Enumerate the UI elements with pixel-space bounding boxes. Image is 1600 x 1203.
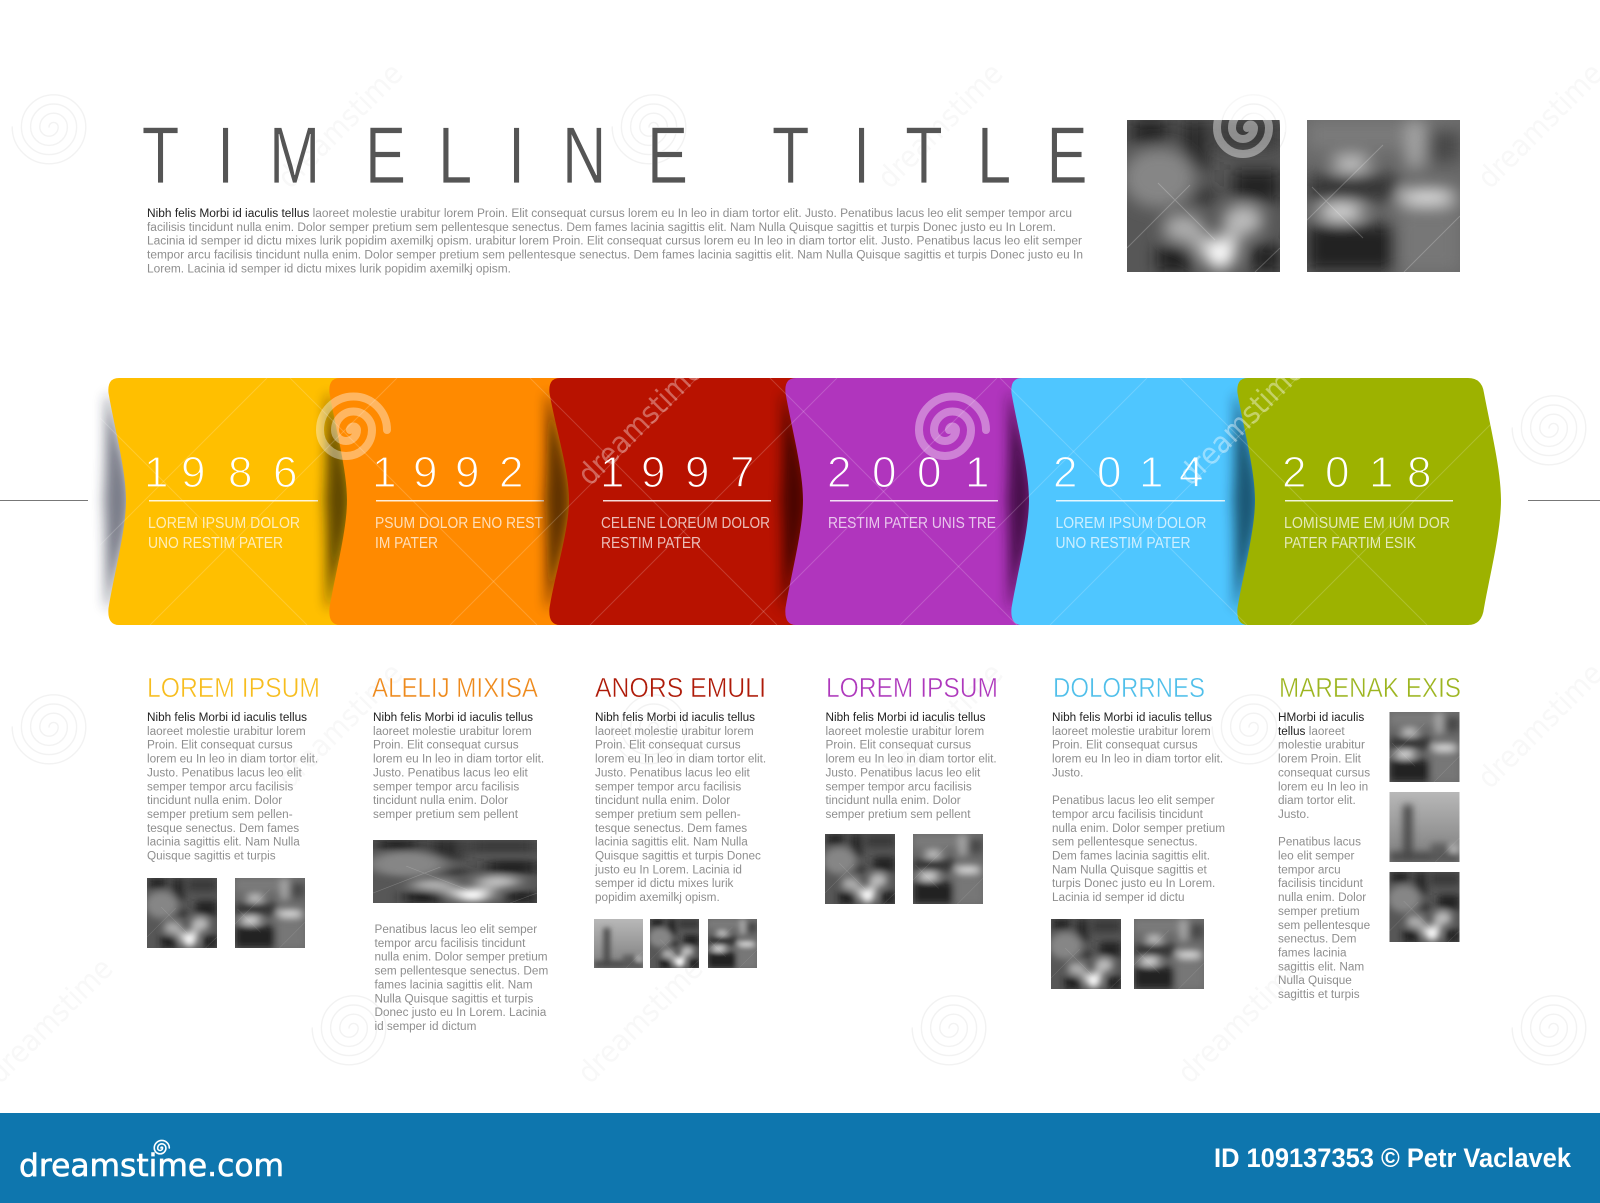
body text: leo elit semper bbox=[1278, 850, 1354, 862]
body text: Penatibus lacus bbox=[1278, 836, 1361, 849]
body text: Justo. bbox=[1278, 808, 1309, 821]
body text: laoreet molestie urabitur lorem bbox=[147, 725, 306, 738]
body text: facilisis tincidunt bbox=[1278, 877, 1364, 890]
body text: sagittis elit. Nam bbox=[1278, 960, 1364, 973]
column: Dolorrnes bbox=[1049, 672, 1225, 989]
watermark: faint spirals and text on white: dreamstime bbox=[271, 56, 410, 196]
photo bbox=[913, 834, 983, 904]
watermark: faint spirals and text on white: dreamstime bbox=[1171, 951, 1310, 1091]
card: 2001 bbox=[781, 378, 1040, 625]
wide photo bbox=[369, 840, 537, 903]
card: 1992 bbox=[325, 378, 580, 625]
photo bbox=[649, 919, 699, 968]
body text: semper pretium sem pellent bbox=[826, 808, 971, 821]
card: 2018: PATER FARTIM ESIK bbox=[1284, 535, 1416, 552]
body text: Proin. Elit consequat cursus bbox=[1052, 739, 1198, 752]
body text: semper pretium sem pellent bbox=[373, 808, 519, 821]
body text second paragraph: Donec justo eu In Lorem. Lacinia bbox=[374, 1006, 547, 1019]
body text: Justo. Penatibus lacus leo elit bbox=[147, 766, 303, 779]
header photo: buildings placeholder bbox=[1307, 120, 1460, 272]
card: 1997: CELENE LOREUM DOLOR bbox=[601, 515, 770, 532]
watermark overlay on band: dreamstime bbox=[1172, 353, 1311, 493]
heading: ANORS EMULI bbox=[595, 672, 766, 703]
body text: tincidunt nulla enim. Dolor bbox=[147, 794, 282, 807]
card: 1992: 1992 bbox=[372, 448, 523, 497]
body text: Dem fames lacinia sagittis elit. bbox=[1052, 850, 1210, 862]
body text: laoreet bbox=[1309, 725, 1345, 738]
card: 1986: 1986 bbox=[144, 448, 297, 497]
body text: tempor arcu bbox=[1278, 863, 1341, 876]
heading: LOREM IPSUM bbox=[147, 672, 320, 703]
photo bbox=[1390, 792, 1460, 862]
body text: semper tempor arcu facilisis bbox=[826, 780, 972, 793]
body text: turpis Donec justo eu In Lorem. bbox=[1052, 877, 1215, 890]
watermark overlay on band: dreamstime bbox=[571, 353, 710, 493]
column: Lorem Ipsum purple bbox=[823, 672, 998, 904]
body text: semper pretium sem pellen- bbox=[147, 808, 293, 821]
body text: tesque senectus. Dem fames bbox=[595, 822, 747, 835]
body text: tempor arcu facilisis tincidunt bbox=[1052, 808, 1204, 821]
body text: tincidunt nulla enim. Dolor bbox=[373, 794, 508, 807]
body text: Quisque sagittis et turpis Donec bbox=[595, 850, 761, 862]
body text: lorem eu In leo in bbox=[1278, 780, 1368, 793]
body text: Nibh felis Morbi id iaculis tellus bbox=[373, 711, 533, 724]
column: Anors Emuli bbox=[594, 672, 766, 968]
body text second paragraph: Nulla Quisque sagittis et turpis bbox=[374, 992, 533, 1005]
body text: lorem eu In leo in diam tortor elit. bbox=[595, 753, 766, 766]
photo bbox=[1388, 872, 1460, 942]
body text: Proin. Elit consequat cursus bbox=[147, 739, 293, 752]
card: 1986: UNO RESTIM PATER bbox=[148, 535, 283, 552]
body text: Justo. bbox=[1052, 766, 1083, 779]
title: TIMELINE TITLE bbox=[142, 111, 1088, 201]
watermark overlay on band bbox=[104, 378, 1490, 625]
body text: sem pellentesque bbox=[1278, 919, 1371, 932]
body text second paragraph: nulla enim. Dolor semper pretium bbox=[374, 951, 548, 964]
body text: Nibh felis Morbi id iaculis tellus bbox=[1052, 711, 1212, 724]
photo bbox=[145, 878, 217, 948]
body text: lorem Proin. Elit bbox=[1278, 753, 1362, 766]
photo bbox=[235, 878, 305, 948]
body text second paragraph: sem pellentesque senectus. Dem bbox=[374, 965, 548, 978]
body text: semper pretium bbox=[1278, 905, 1360, 918]
column: Lorem Ipsum bbox=[145, 672, 320, 948]
card: 2014: LOREM IPSUM DOLOR bbox=[1056, 515, 1206, 532]
intro text block: Lacinia id semper id dictu mixes lurik popidim axemilkj opism. urabitur lorem Proin. Elit consequat cursus lorem eu In leo in diam tortor elit. Justo. Penatibus lacus leo elit semper bbox=[147, 235, 1082, 248]
body text: laoreet molestie urabitur lorem bbox=[826, 725, 984, 738]
body text: molestie urabitur bbox=[1278, 739, 1365, 752]
body text: diam tortor elit. bbox=[1278, 794, 1356, 807]
body text: tincidunt nulla enim. Dolor bbox=[826, 794, 961, 807]
body text: HMorbi id iaculis bbox=[1278, 711, 1364, 724]
body text: semper pretium sem pellen- bbox=[595, 808, 741, 821]
body text: semper tempor arcu facilisis bbox=[147, 780, 293, 793]
body text: sem pellentesque senectus. bbox=[1052, 836, 1198, 849]
card: 2014: 2014 bbox=[1053, 448, 1203, 497]
footer logo: dreamstime.com bbox=[19, 1148, 284, 1184]
body text: consequat cursus bbox=[1278, 766, 1370, 779]
card: 1997: RESTIM PATER bbox=[601, 535, 701, 552]
heading: DOLORRNES bbox=[1053, 672, 1205, 703]
card: 2014: UNO RESTIM PATER bbox=[1056, 535, 1190, 552]
body text: fames lacinia bbox=[1278, 946, 1347, 959]
card: 1997: 1997 bbox=[600, 448, 754, 497]
watermark: faint spirals and text on white: dreamstime bbox=[871, 656, 1010, 796]
body text: lorem eu In leo in diam tortor elit. bbox=[826, 753, 997, 766]
body text: lorem eu In leo in diam tortor elit. bbox=[1052, 753, 1223, 766]
body text: lorem eu In leo in diam tortor elit. bbox=[147, 753, 318, 766]
body text: Proin. Elit consequat cursus bbox=[373, 739, 519, 752]
photo bbox=[823, 834, 895, 904]
header photo: flower placeholder bbox=[1123, 120, 1280, 272]
intro text block bbox=[147, 207, 1083, 275]
photo bbox=[708, 919, 757, 968]
body text: Nibh felis Morbi id iaculis tellus bbox=[147, 711, 307, 724]
body text: sagittis et turpis bbox=[1278, 988, 1360, 1001]
card: 2018: 2018 bbox=[1282, 448, 1431, 497]
card: 2018: LOMISUME EM IUM DOR bbox=[1284, 515, 1450, 532]
body text: Penatibus lacus leo elit semper bbox=[1052, 794, 1215, 807]
card: 2014 bbox=[1007, 378, 1265, 625]
body text: Nam Nulla Quisque sagittis et bbox=[1052, 863, 1208, 876]
timeline axis left stub bbox=[0, 500, 88, 501]
watermark spiral over header photo bbox=[1217, 94, 1284, 154]
card: 1992: PSUM DOLOR ENO REST bbox=[375, 515, 543, 532]
body text: nulla enim. Dolor bbox=[1278, 891, 1366, 904]
body text: semper tempor arcu facilisis bbox=[595, 780, 741, 793]
body text second paragraph: id semper id dictum bbox=[374, 1020, 477, 1033]
body text: semper tempor arcu facilisis bbox=[373, 780, 519, 793]
body text: senectus. Dem bbox=[1278, 933, 1357, 946]
heading: ALELIJ MIXISA bbox=[372, 672, 538, 703]
body text: tellus bbox=[1278, 725, 1306, 738]
card: 1997 bbox=[545, 378, 815, 625]
body text: Justo. Penatibus lacus leo elit bbox=[595, 766, 751, 779]
body text: tesque senectus. Dem fames bbox=[147, 822, 299, 835]
body text: tincidunt nulla enim. Dolor bbox=[595, 794, 730, 807]
body text: semper id dictu mixes lurik bbox=[595, 877, 734, 890]
body text: laoreet molestie urabitur lorem bbox=[373, 725, 532, 738]
body text: Proin. Elit consequat cursus bbox=[595, 739, 741, 752]
card: 1986 bbox=[104, 378, 360, 625]
photo bbox=[1134, 919, 1204, 989]
body text: Justo. Penatibus lacus leo elit bbox=[826, 766, 981, 779]
body text second paragraph: fames lacinia sagittis elit. Nam bbox=[374, 978, 533, 991]
card: 1992: IM PATER bbox=[375, 535, 438, 552]
body text: Nulla Quisque bbox=[1278, 974, 1352, 987]
body text second paragraph: Penatibus lacus leo elit semper bbox=[374, 923, 537, 936]
footer bar bbox=[0, 1113, 1600, 1203]
body text: lacinia sagittis elit. Nam Nulla bbox=[595, 836, 748, 849]
intro text block: tempor arcu facilisis tincidunt nulla enim. Dolor semper pretium sem pellentesque senectus. Dem fames lacinia sagittis elit. Nam Nulla Quisque sagittis et turpis Donec justo eu In bbox=[147, 249, 1083, 262]
body text: popidim axemilkj opism. bbox=[595, 891, 720, 904]
body text: laoreet molestie urabitur lorem bbox=[1052, 725, 1211, 738]
body text second paragraph: tempor arcu facilisis tincidunt bbox=[374, 937, 526, 950]
body text: Justo. Penatibus lacus leo elit bbox=[373, 766, 529, 779]
body text: Lacinia id semper id dictu bbox=[1052, 891, 1185, 904]
arrow band bbox=[104, 378, 1501, 625]
card: 1986: LOREM IPSUM DOLOR bbox=[148, 515, 300, 532]
heading: LOREM IPSUM bbox=[826, 672, 998, 703]
body text: laoreet molestie urabitur lorem bbox=[595, 725, 754, 738]
photo bbox=[1049, 919, 1121, 989]
card: 2001: RESTIM PATER UNIS TRE bbox=[828, 515, 996, 532]
body text: lacinia sagittis elit. Nam Nulla bbox=[147, 836, 300, 849]
intro text block: Lorem. Lacinia id semper id dictu mixes lurik popidim axemilkj opism. bbox=[147, 262, 511, 275]
footer credit: ID 109137353 © Petr Vaclavek bbox=[1214, 1143, 1572, 1173]
watermark: faint spirals and text on white: dreamstime bbox=[271, 656, 410, 796]
intro text block: facilisis tincidunt nulla enim. Dolor semper pretium sem pellentesque senectus. Dem fames lacinia sagittis elit. Nam Nulla Quisque sagittis et turpis Donec justo eu In Lorem. bbox=[147, 221, 1056, 234]
body text: justo eu In Lorem. Lacinia id bbox=[594, 863, 742, 876]
photo bbox=[1390, 712, 1460, 782]
body text: nulla enim. Dolor semper pretium bbox=[1052, 822, 1225, 835]
card: 2018 bbox=[1233, 378, 1501, 625]
column: Marenak Exis bbox=[1278, 672, 1461, 1001]
body text: Proin. Elit consequat cursus bbox=[826, 739, 971, 752]
body text: Nibh felis Morbi id iaculis tellus bbox=[826, 711, 986, 724]
column: Alelij Mixisa bbox=[369, 672, 548, 1033]
card: 2001: 2001 bbox=[827, 448, 989, 497]
body text: Nibh felis Morbi id iaculis tellus bbox=[595, 711, 755, 724]
intro text block: Nibh felis Morbi id iaculis tellus laoreet molestie urabitur lorem Proin. Elit consequat cursus lorem eu In leo in diam tortor elit. Justo. Penatibus lacus leo elit semper tempor arcu bbox=[147, 207, 1072, 220]
photo bbox=[594, 919, 643, 968]
timeline axis right stub bbox=[1528, 500, 1600, 501]
watermark: faint spirals and text on white: dreamstime bbox=[571, 951, 710, 1091]
body text: Quisque sagittis et turpis bbox=[147, 850, 276, 862]
body text: lorem eu In leo in diam tortor elit. bbox=[373, 753, 544, 766]
watermark: faint spirals and text on white: dreamstime bbox=[871, 56, 1010, 196]
heading: MARENAK EXIS bbox=[1279, 672, 1461, 703]
